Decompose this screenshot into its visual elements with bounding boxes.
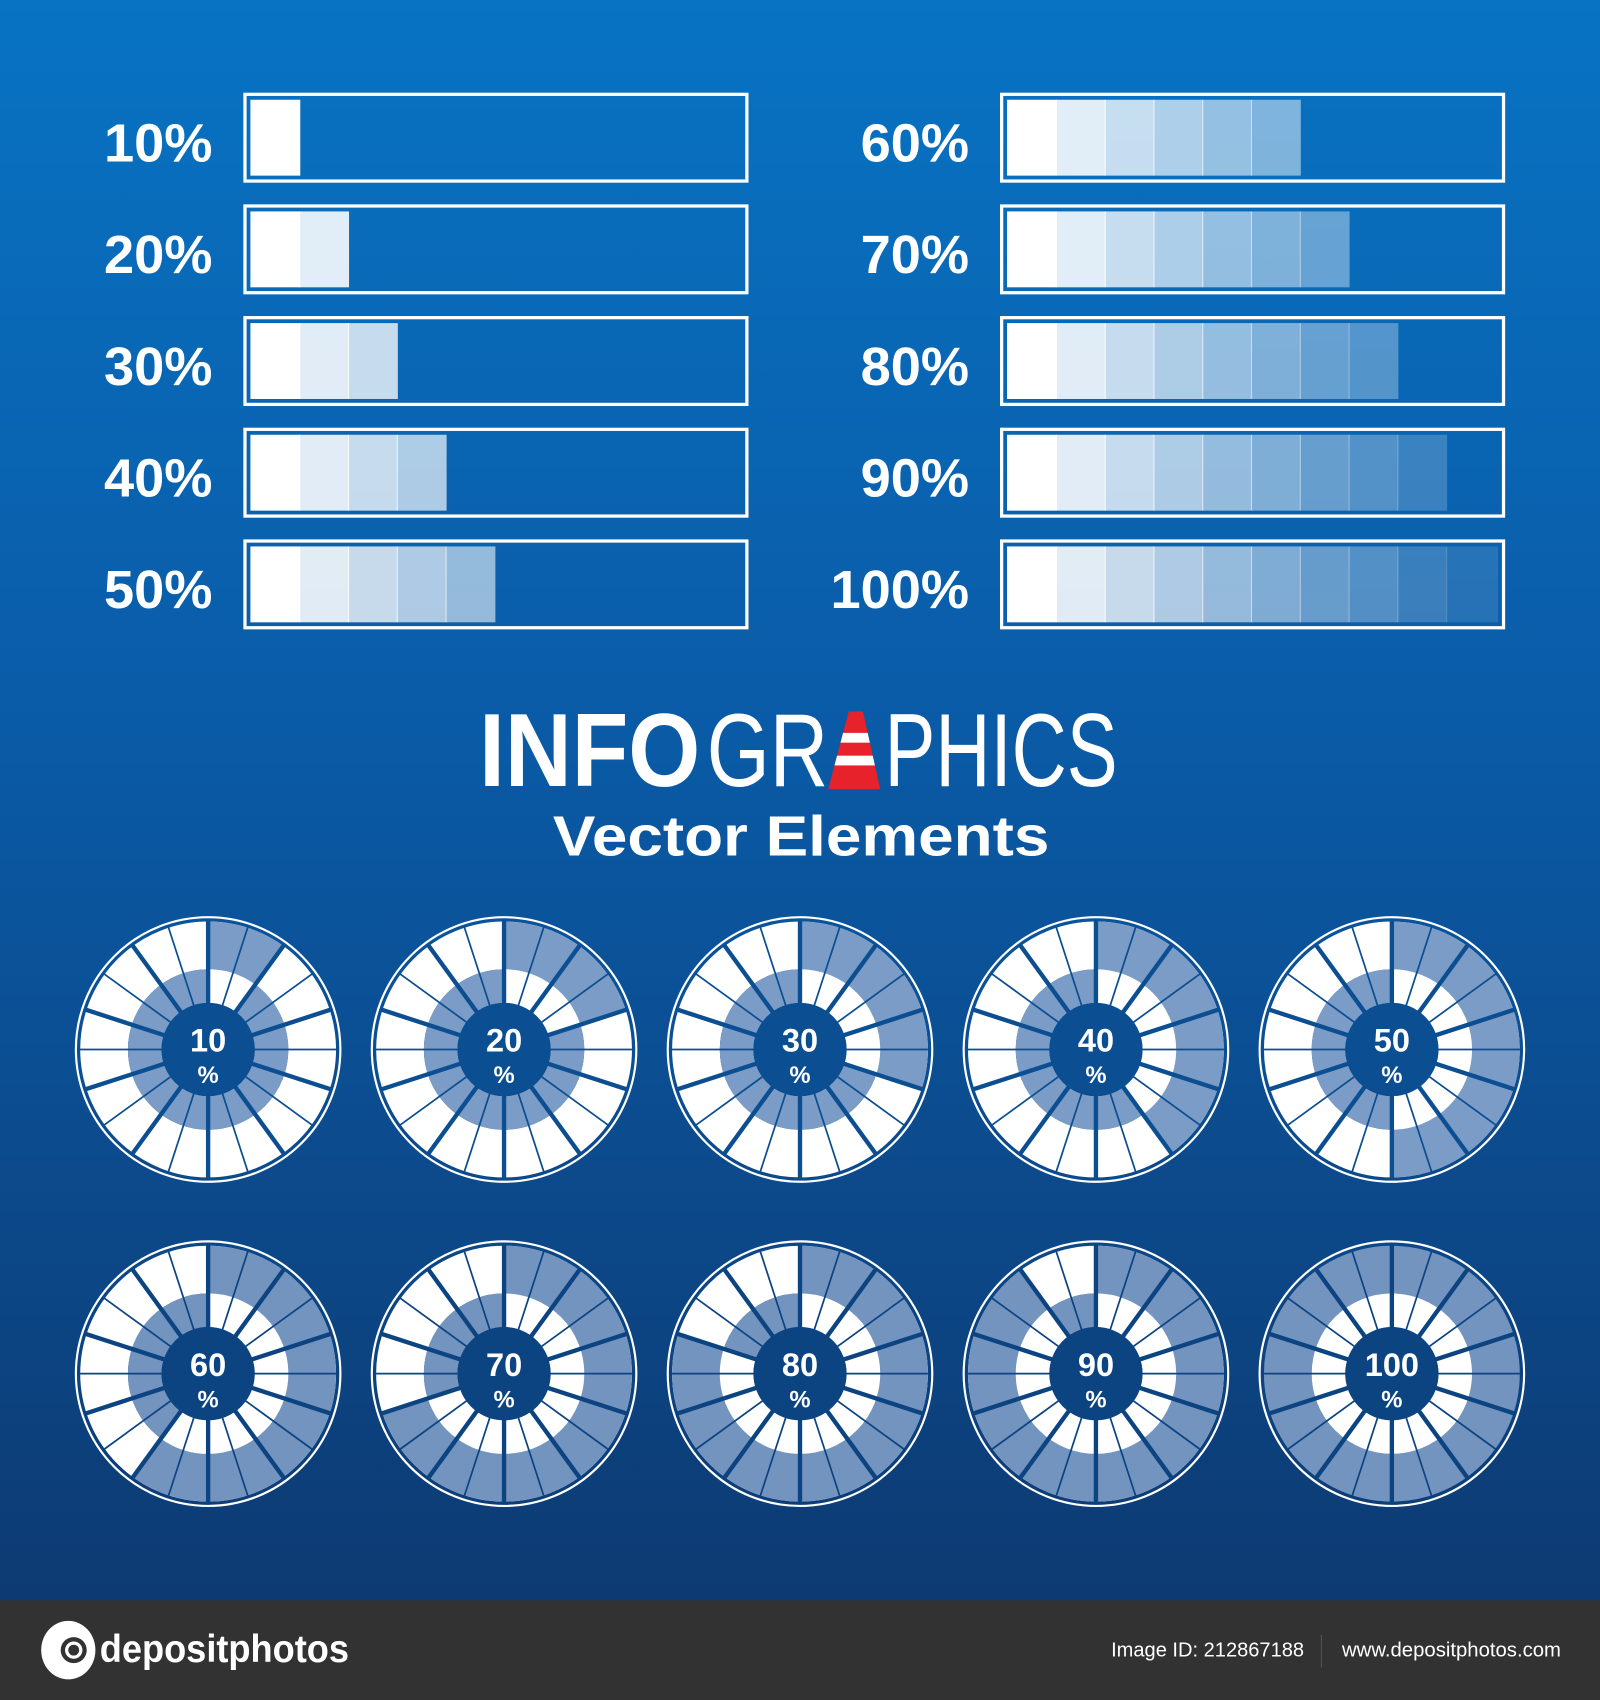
panel: bar indicators left: 10% <box>104 114 212 174</box>
chart: 60% <box>76 1241 340 1506</box>
chart: 50%: % <box>1381 1062 1402 1089</box>
chart: 90% <box>964 1241 1228 1506</box>
chart: 40%: % <box>1085 1062 1107 1089</box>
panel: bar indicators right: 80% <box>861 337 969 397</box>
panel: bar indicators left: 50% <box>104 560 212 620</box>
panel: bar indicators right: 70% <box>861 225 969 285</box>
title <box>485 711 1114 790</box>
footer bar <box>0 1600 1600 1700</box>
chart: 30% <box>668 917 932 1182</box>
chart: 80%: % <box>789 1386 811 1413</box>
chart: 30%: % <box>789 1062 811 1089</box>
chart: 90%: 90 <box>1078 1347 1114 1383</box>
panel: bar indicators right: 100% <box>831 560 969 620</box>
footer url: www.depositphotos.com <box>1341 1639 1561 1662</box>
chart: 10%: % <box>198 1062 219 1089</box>
title: GR <box>707 693 828 809</box>
chart: 10% <box>76 917 340 1182</box>
chart: 30%: 30 <box>782 1023 818 1059</box>
panel: bar indicators left: 30% <box>104 337 212 397</box>
chart: 80%: 80 <box>782 1347 818 1383</box>
chart: 70% <box>372 1241 636 1506</box>
chart: 10%: 10 <box>190 1023 226 1059</box>
chart: 100%: 100 <box>1365 1347 1419 1383</box>
chart: 60%: 60 <box>190 1347 226 1383</box>
panel: bar indicators right: 90% <box>861 449 969 509</box>
title: INFO <box>479 693 700 809</box>
chart: 40%: 40 <box>1078 1023 1114 1059</box>
circle charts row 2 <box>76 1241 1524 1506</box>
chart: 50% <box>1260 917 1524 1182</box>
title: PHICS <box>885 693 1118 809</box>
subtitle: Vector Elements <box>553 804 1049 867</box>
chart: 90%: % <box>1085 1386 1107 1413</box>
chart: 40% <box>964 917 1228 1182</box>
panel: bar indicators left: 20% <box>104 225 212 285</box>
footer image id: Image ID: 212867188 <box>1111 1639 1304 1662</box>
chart: 20%: % <box>493 1062 515 1089</box>
panel: bar indicators left: 40% <box>104 449 212 509</box>
chart: 70%: 70 <box>486 1347 522 1383</box>
chart: 70%: % <box>493 1386 515 1413</box>
panel: bar indicators right: 60% <box>861 114 969 174</box>
panel: bar indicators right <box>831 94 1504 628</box>
panel: bar indicators left <box>104 94 747 628</box>
circle charts row 1 <box>76 917 1524 1182</box>
chart: 20%: 20 <box>486 1023 522 1059</box>
chart: 100% <box>1260 1241 1524 1506</box>
chart: 60%: % <box>198 1386 219 1413</box>
footer logo text: depositphotos <box>100 1628 349 1671</box>
chart: 100%: % <box>1381 1386 1402 1413</box>
chart: 50%: 50 <box>1374 1023 1410 1059</box>
icon: camera logo <box>41 1621 95 1679</box>
icon: traffic cone <box>828 711 880 790</box>
chart: 20% <box>372 917 636 1182</box>
chart: 80% <box>668 1241 932 1506</box>
